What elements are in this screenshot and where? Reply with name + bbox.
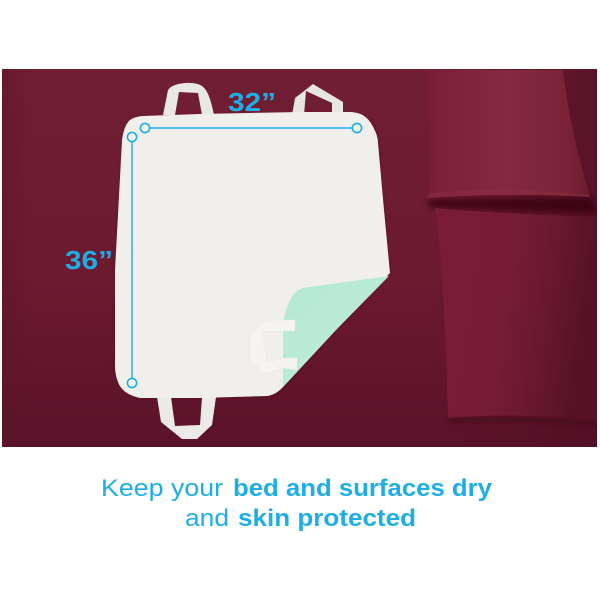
- upper pillow hem: [428, 192, 590, 198]
- dimension 36 inches: [65, 132, 137, 388]
- top end marker: [127, 132, 137, 142]
- side strap: [250, 320, 297, 374]
- caption line 1: Keep your: [101, 475, 223, 502]
- width label: 32”: [228, 87, 276, 117]
- caption line 2: and: [185, 505, 229, 532]
- lower pillow bottom shadow: [450, 416, 596, 426]
- left end marker: [140, 123, 150, 133]
- pad shadow: [115, 113, 390, 399]
- height line: [131, 142, 133, 378]
- dimension 32 inches: [140, 87, 362, 133]
- pad body: [115, 112, 390, 398]
- upper pillow: [423, 70, 590, 198]
- lower pillow: [435, 208, 582, 418]
- green underside: [283, 276, 389, 387]
- pillow shadow: [427, 197, 597, 214]
- top left handle: [163, 83, 214, 115]
- bottom handle: [157, 397, 216, 439]
- product: underpad with handles: [115, 83, 390, 439]
- photo: bedsheet background: [2, 69, 597, 447]
- width line: [150, 127, 352, 129]
- bottom end marker: [127, 378, 137, 388]
- caption: bed and surfaces dry: [233, 475, 493, 502]
- height label: 36”: [65, 245, 113, 275]
- caption: [101, 475, 493, 532]
- top right handle: [292, 84, 343, 115]
- pillows: [423, 70, 597, 427]
- right end marker: [352, 123, 362, 133]
- caption: skin protected: [238, 505, 416, 532]
